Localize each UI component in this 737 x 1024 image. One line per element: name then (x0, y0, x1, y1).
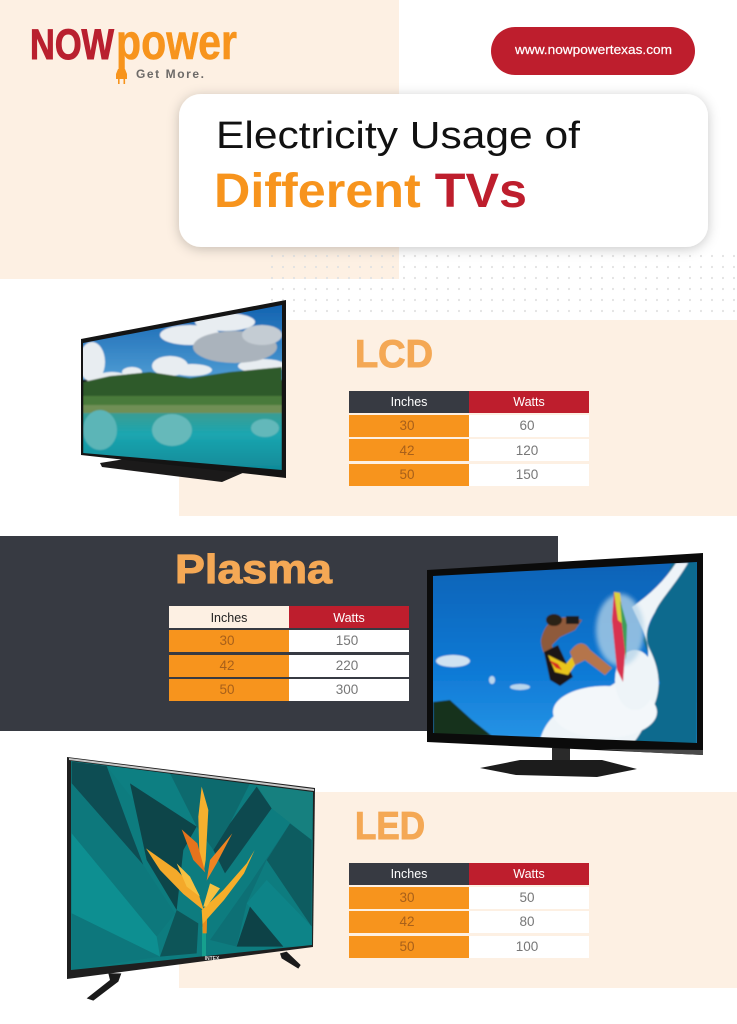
table: LCD: 120 (516, 443, 538, 458)
title line two: Different TVs (214, 165, 527, 218)
table: LED: 80 (519, 914, 535, 929)
title line one: Electricity Usage of (216, 115, 580, 157)
table: LED: 30 (399, 890, 415, 905)
table: LED: 42 (399, 914, 415, 929)
heading: LCD: LCD (355, 333, 433, 376)
logo: NowPower (30, 14, 237, 84)
heading: Plasma: Plasma (175, 546, 333, 592)
table: LED (349, 863, 589, 958)
dot pattern (270, 254, 737, 319)
heading: LED: LED (355, 805, 425, 848)
table: LED: 50 (519, 890, 535, 905)
title card (179, 94, 708, 247)
table: LCD: 60 (519, 418, 535, 433)
TV: LCD (79, 300, 286, 482)
table: Plasma: Inches (211, 611, 247, 625)
panel: Plasma (0, 536, 558, 731)
table: LED: Inches (391, 867, 427, 881)
panel: LCD (179, 320, 737, 516)
table: Plasma: 300 (336, 682, 358, 697)
table: Plasma: 42 (219, 658, 235, 673)
table: Plasma: 50 (219, 682, 235, 697)
table: LCD: 42 (399, 443, 415, 458)
table: Plasma: 220 (336, 658, 358, 673)
brand label: INTEX (205, 956, 220, 962)
table: LCD: 30 (399, 418, 415, 433)
table: LCD (349, 391, 589, 486)
panel: LED (179, 792, 737, 988)
logo: NowPower: Get More. (136, 67, 204, 81)
table: LCD: Watts (513, 395, 545, 409)
table: LED: 100 (516, 939, 538, 954)
logo: NowPower: NOW (30, 21, 114, 69)
table: Plasma: 150 (336, 633, 358, 648)
TV: LED (67, 757, 317, 1001)
website button (491, 27, 695, 75)
table: LED: 50 (399, 939, 415, 954)
background panel: top peach (0, 0, 399, 279)
website button: www.nowpowertexas.com (514, 42, 672, 57)
table: LED: Watts (513, 867, 545, 881)
TV: Plasma (427, 553, 703, 777)
table: Plasma: 30 (219, 633, 235, 648)
table: LCD: 150 (516, 467, 538, 482)
table: Plasma: Watts (333, 611, 365, 625)
table: LCD: Inches (391, 395, 427, 409)
table: LCD: 50 (399, 467, 415, 482)
table: Plasma (169, 606, 409, 701)
logo: NowPower: power (116, 14, 237, 70)
